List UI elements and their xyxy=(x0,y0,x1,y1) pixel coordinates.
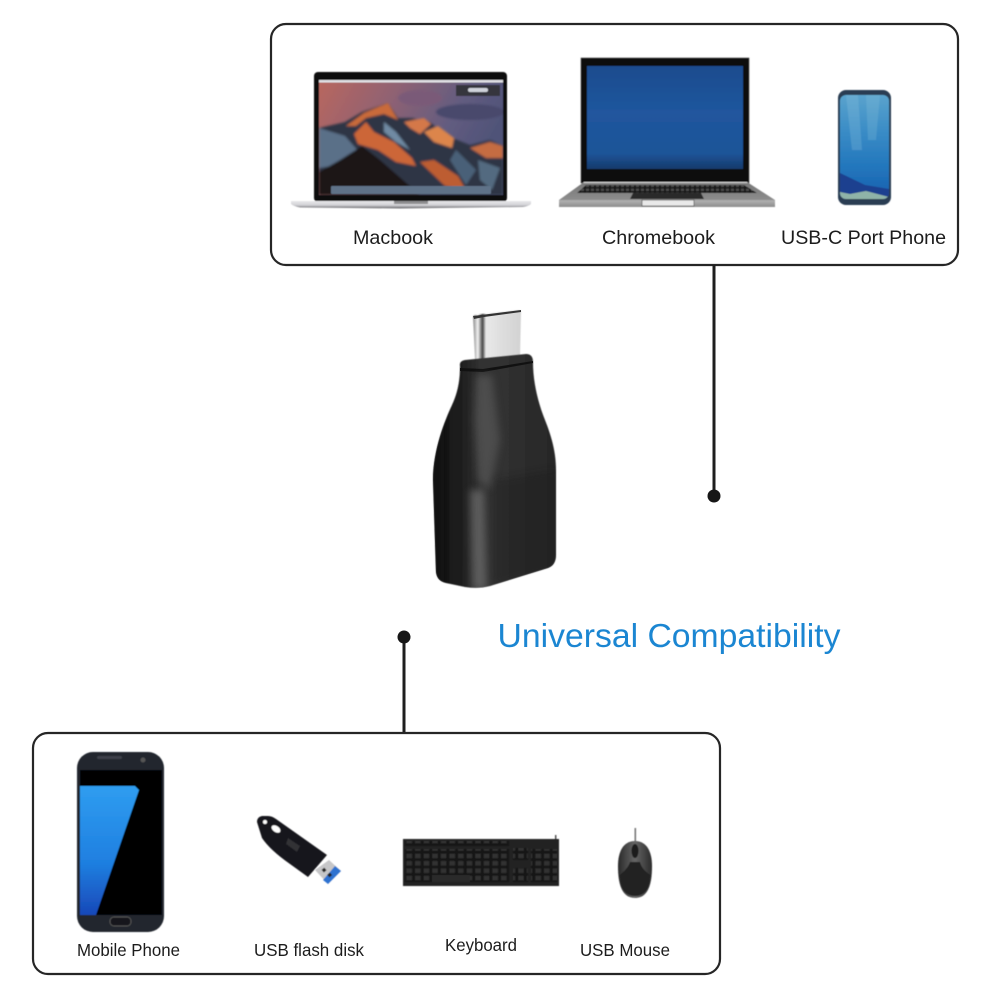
icon: Macbook laptop xyxy=(291,72,531,208)
label: USB-C Port Phone: USB-C Port Phone xyxy=(781,227,946,249)
label: USB Mouse: USB Mouse xyxy=(580,940,670,960)
icon: keyboard xyxy=(403,835,559,886)
label: Chromebook: Chromebook xyxy=(602,227,715,249)
panel: peripheral devices xyxy=(33,733,720,974)
icon: USB mouse xyxy=(618,828,652,898)
panel: host devices xyxy=(271,24,958,265)
heading: Universal Compatibility: Universal Compatibility xyxy=(498,618,841,655)
icon: USB flash disk xyxy=(257,816,341,884)
label: Mobile Phone: Mobile Phone xyxy=(77,940,180,960)
icon: USB-C port phone xyxy=(838,90,891,205)
icon: Chromebook laptop xyxy=(559,58,775,207)
label: USB flash disk: USB flash disk xyxy=(254,940,364,960)
label: Macbook: Macbook xyxy=(353,227,433,249)
label: Keyboard: Keyboard xyxy=(445,935,517,955)
icon: mobile phone xyxy=(77,752,164,932)
icon: USB-C adapter xyxy=(428,310,556,590)
connector: top panel to adapter xyxy=(708,265,720,502)
connector: adapter to bottom panel xyxy=(398,630,410,733)
